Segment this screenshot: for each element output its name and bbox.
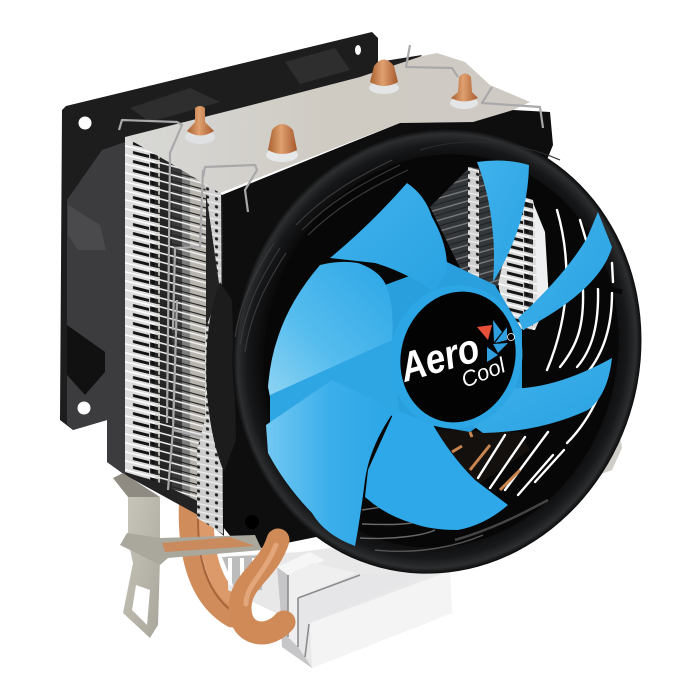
retention bracket (113, 473, 262, 638)
guard slits (478, 210, 613, 495)
pin two (266, 124, 298, 162)
fin two (298, 572, 433, 657)
back fan (60, 32, 422, 475)
aluminium base heatsink (222, 548, 452, 668)
front fan frame (222, 110, 553, 548)
pin four (450, 74, 478, 109)
copper heatpipes rear (188, 480, 240, 618)
hub shroud (385, 262, 522, 432)
hub: Cool (458, 352, 510, 393)
frame side lens (206, 282, 236, 472)
frame corner hole (245, 515, 259, 529)
copper pins (185, 60, 478, 162)
pin one (185, 106, 215, 144)
hub skirt (374, 270, 538, 444)
blade: top right (477, 161, 529, 282)
hub (374, 270, 538, 444)
fan ring (183, 82, 691, 620)
rear heatsink sliver (590, 420, 622, 478)
middle fin lines (158, 148, 206, 505)
left fin column (125, 137, 158, 482)
copper heatpipe front (240, 540, 284, 633)
blade: left lower fill (270, 340, 400, 440)
guard bracket (570, 278, 622, 292)
top plate (125, 53, 530, 193)
blade: lower left (266, 380, 395, 546)
blade: bottom (365, 410, 508, 530)
fan blades (266, 161, 612, 546)
right fin column (197, 172, 223, 534)
fin gaps (288, 575, 360, 657)
mounting holes (78, 45, 361, 414)
fin three front (310, 571, 452, 668)
pin three (369, 60, 399, 94)
blade: left (268, 262, 393, 397)
hub cap (386, 278, 530, 436)
blade: top left (330, 183, 447, 292)
copper glimpses (452, 432, 520, 490)
spring wires (119, 45, 543, 490)
fins seen through fan (430, 167, 549, 490)
fin stack (125, 137, 224, 536)
lower guard arcs (360, 500, 548, 551)
left base side (277, 567, 312, 668)
fin one (277, 552, 325, 575)
blade: right (518, 212, 612, 330)
blade: lower right (465, 358, 612, 433)
logo mark (477, 320, 514, 362)
logo text: Aero (394, 324, 484, 391)
ring ribs (235, 142, 560, 352)
fan opening (220, 114, 662, 588)
